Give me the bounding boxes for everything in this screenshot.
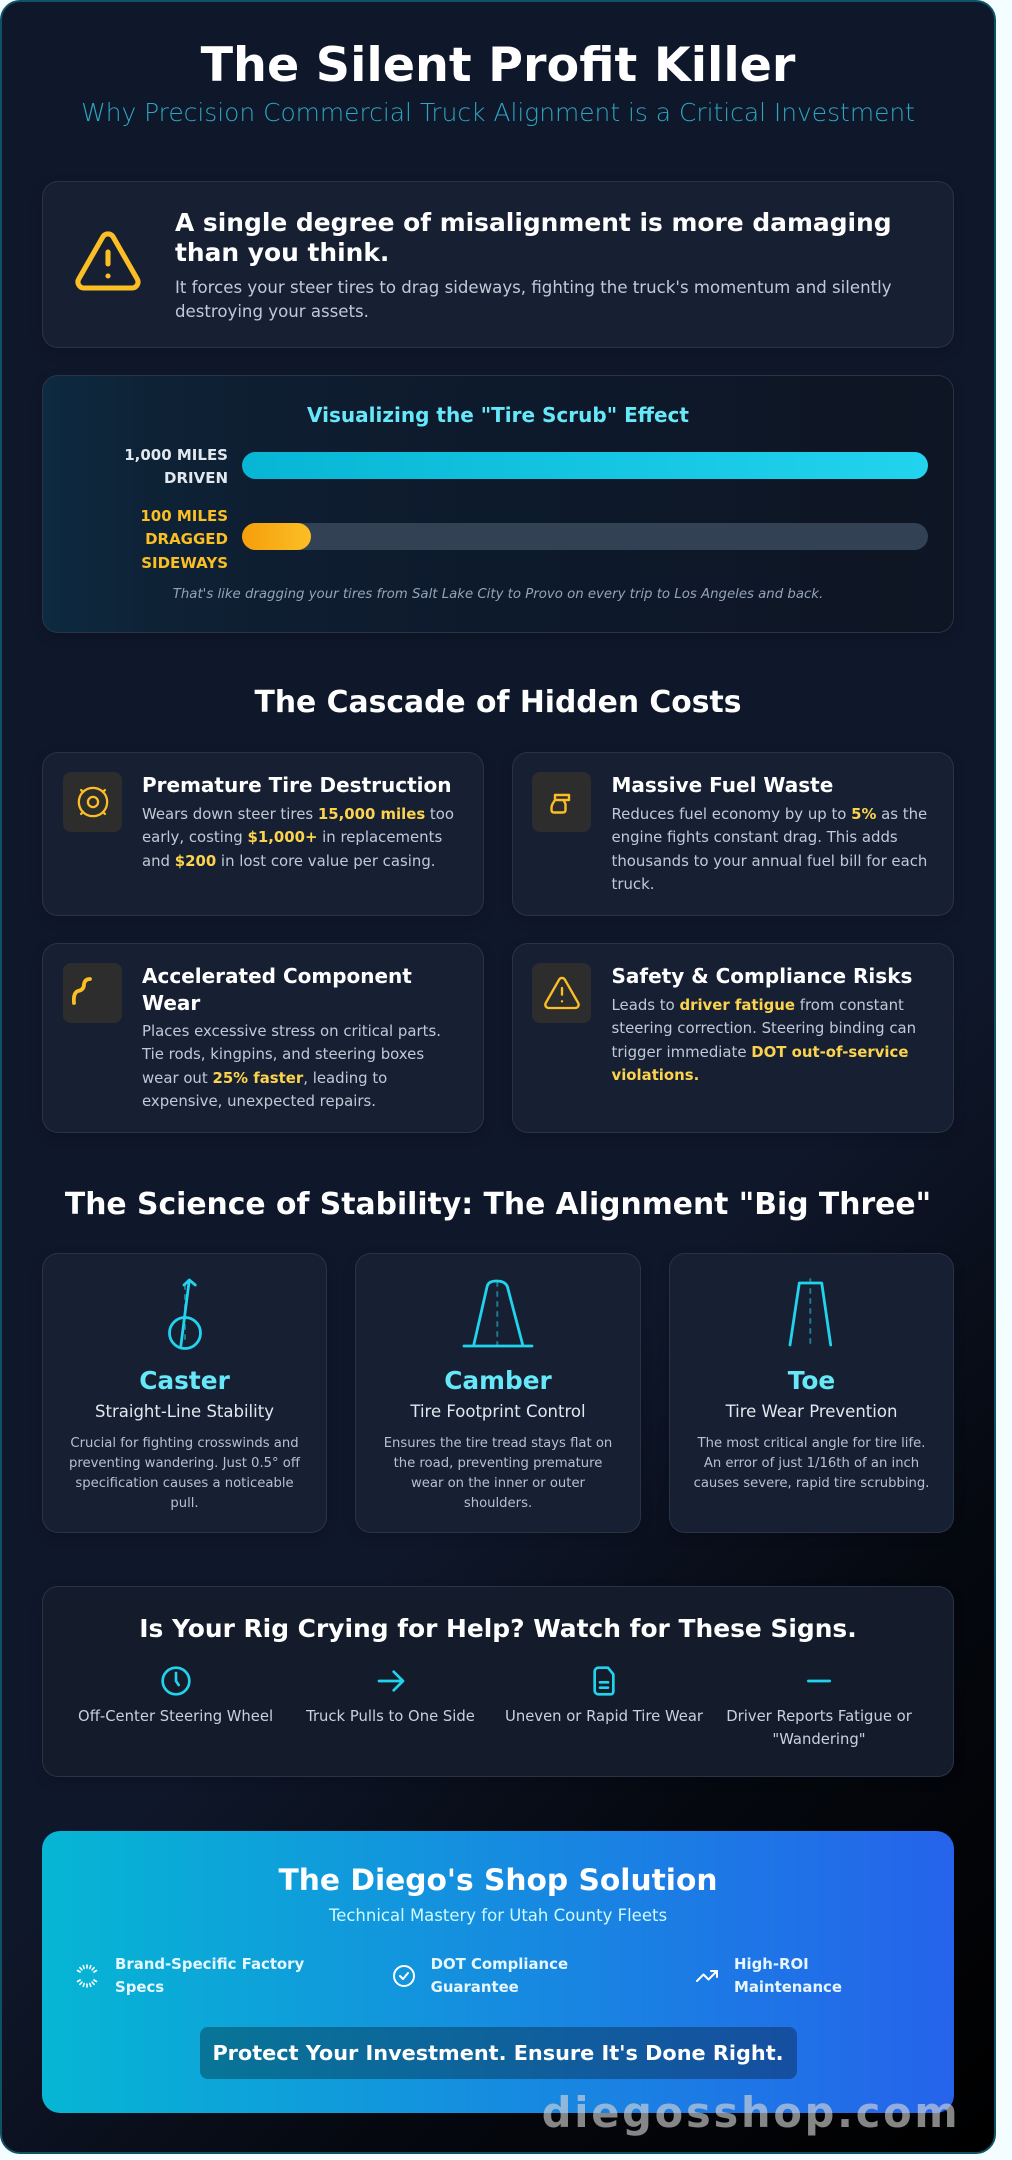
title: The Silent Profit Killer <box>201 38 795 93</box>
card text <box>384 1436 612 1511</box>
card title <box>142 964 412 1015</box>
feature text: Brand-Specific Factory <box>115 1955 304 1973</box>
panel: solution call to action <box>42 1831 954 2113</box>
panel: safety and compliance <box>512 943 954 1133</box>
icon: tire <box>63 772 122 832</box>
watermark: diegosshop.com <box>542 2088 960 2136</box>
panel: accelerated component wear <box>42 943 484 1133</box>
card text: the road, preventing premature <box>394 1456 602 1471</box>
card text <box>612 996 916 1084</box>
card title: Massive Fuel Waste <box>612 773 833 797</box>
card text: An error of just 1/16th of an inch <box>704 1456 919 1471</box>
icon: arrow <box>378 1670 404 1692</box>
signs heading: Is Your Rig Crying for Help? Watch for These Signs. <box>139 1614 857 1643</box>
feature: factory specs <box>76 1955 304 1996</box>
icon: document <box>593 1666 615 1696</box>
sign label <box>726 1708 912 1748</box>
card text: Tie rods, kingpins, and steering boxes <box>142 1045 424 1063</box>
section heading: big three: The Science of Stability: The Alignment "Big Three" <box>65 1187 931 1222</box>
card title: Safety & Compliance Risks <box>612 964 912 988</box>
card text <box>694 1436 929 1491</box>
card text: pull. <box>170 1496 199 1511</box>
feature text: Guarantee <box>431 1978 519 1996</box>
card text: specification causes a noticeable <box>75 1476 294 1491</box>
button: protect your investment <box>200 2027 796 2079</box>
icon: clock <box>161 1666 191 1696</box>
panel: misalignment alert <box>42 181 954 348</box>
card text: Reduces fuel economy by up to 5% as the <box>612 805 927 823</box>
chart note: That's like dragging your tires from Salt Lake City to Provo on every trip to Los Angeles and back. <box>173 587 823 602</box>
icon: loader <box>76 1964 98 1988</box>
alert heading <box>175 208 892 267</box>
sign label: Truck Pulls to One Side <box>306 1708 475 1725</box>
alert heading: A single degree of misalignment is more damaging <box>175 208 892 237</box>
icon: warning triangle <box>75 231 141 290</box>
icon: trending up <box>696 1970 718 1982</box>
card text: thousands to your annual fuel bill for each <box>612 852 927 870</box>
card text: Ensures the tire tread stays flat on <box>384 1436 612 1451</box>
card text: Leads to driver fatigue from constant <box>612 996 904 1014</box>
icon: check circle <box>393 1965 415 1987</box>
feature text <box>431 1955 568 1996</box>
panel: premature tire destruction <box>42 752 484 916</box>
feature text <box>734 1955 842 1996</box>
card text: expensive, unexpected repairs. <box>142 1092 376 1110</box>
icon: caster angle <box>168 1278 202 1350</box>
card title: Toe <box>788 1366 835 1395</box>
bar label: dragged: SIDEWAYS <box>141 554 228 572</box>
bar chart: miles driven <box>124 446 928 487</box>
sign label: "Wandering" <box>772 1731 866 1748</box>
card text: steering correction. Steering binding can <box>612 1019 916 1037</box>
bar label: dragged: 100 MILES <box>140 507 228 525</box>
feature text: High-ROI <box>734 1955 809 1973</box>
bar track and fill <box>242 523 928 550</box>
bar chart: miles dragged <box>140 507 928 572</box>
panel: toe <box>669 1253 954 1533</box>
card text: early, costing $1,000+ in replacements <box>142 828 442 846</box>
solution heading: The Diego's Shop Solution <box>278 1863 718 1898</box>
bar label: driven: 1,000 MILES <box>124 446 228 464</box>
panel: warning signs <box>42 1586 954 1777</box>
feature text <box>115 1955 304 1996</box>
feature: DOT guarantee <box>393 1955 568 1996</box>
bar label: dragged <box>140 507 228 572</box>
icon: worn part <box>63 963 122 1023</box>
section heading: hidden costs: The Cascade of Hidden Costs <box>254 685 741 720</box>
card text: violations. <box>612 1066 699 1084</box>
card text <box>142 805 454 870</box>
button: protect your investment: Protect Your Investment. Ensure It's Done Right. <box>212 2041 784 2065</box>
alert heading: than you think. <box>175 238 389 267</box>
card subtitle: Tire Wear Prevention <box>726 1402 897 1421</box>
card text: Crucial for fighting crosswinds and <box>70 1436 299 1451</box>
card text: trigger immediate DOT out-of-service <box>612 1043 908 1061</box>
icon: toe angle <box>788 1278 832 1346</box>
card text: and $200 in lost core value per casing. <box>142 852 436 870</box>
card text <box>612 805 927 893</box>
sign label: Driver Reports Fatigue or <box>726 1708 912 1725</box>
card title: Camber <box>444 1366 552 1395</box>
card text: The most critical angle for tire life. <box>698 1436 925 1451</box>
card text: preventing wandering. Just 0.5° off <box>69 1456 300 1471</box>
card text: engine fights constant drag. This adds <box>612 828 898 846</box>
panel: tire scrub visualization <box>42 375 954 633</box>
sign label: Uneven or Rapid Tire Wear <box>505 1708 703 1725</box>
subtitle: Why Precision Commercial Truck Alignment is a Critical Investment <box>81 98 915 127</box>
bar label: dragged: DRAGGED <box>145 530 228 548</box>
bar label: driven <box>124 446 228 487</box>
card title: Premature Tire Destruction <box>142 773 451 797</box>
chart heading: Visualizing the "Tire Scrub" Effect <box>307 403 689 427</box>
card text: causes severe, rapid tire scrubbing. <box>694 1476 929 1491</box>
panel: massive fuel waste <box>512 752 954 916</box>
card text <box>69 1436 300 1511</box>
card text: wear on the inner or outer <box>411 1476 585 1491</box>
card subtitle: Tire Footprint Control <box>410 1402 586 1421</box>
card text: shoulders. <box>464 1496 532 1511</box>
icon: dash <box>807 1680 831 1682</box>
card title: Wear <box>142 991 200 1015</box>
card text: Wears down steer tires 15,000 miles too <box>142 805 454 823</box>
bar: 1,000 miles <box>242 452 928 479</box>
card text: wear out 25% faster, leading to <box>142 1069 387 1087</box>
solution subtitle: Technical Mastery for Utah County Fleets <box>329 1906 667 1925</box>
feature: high ROI <box>696 1955 842 1996</box>
panel: camber <box>355 1253 641 1533</box>
card text: truck. <box>612 875 654 893</box>
feature text: DOT Compliance <box>431 1955 568 1973</box>
alert text: destroying your assets. <box>175 302 369 320</box>
icon: safety warning <box>532 963 591 1023</box>
alert text: It forces your steer tires to drag sideways, fighting the truck's momentum and silently <box>175 278 892 297</box>
card title: Accelerated Component <box>142 964 412 988</box>
card text: Places excessive stress on critical parts. <box>142 1022 441 1040</box>
card subtitle: Straight-Line Stability <box>95 1402 274 1421</box>
card title: Caster <box>139 1366 230 1395</box>
sign label: Off-Center Steering Wheel <box>78 1708 273 1725</box>
feature text: Specs <box>115 1978 164 1996</box>
feature text: Maintenance <box>734 1978 842 1996</box>
card text <box>142 1022 441 1110</box>
bar label: driven: DRIVEN <box>164 469 228 487</box>
icon: fuel can <box>532 772 591 832</box>
alert text <box>175 278 892 320</box>
icon: camber angle <box>462 1280 534 1348</box>
panel: caster <box>42 1253 327 1533</box>
